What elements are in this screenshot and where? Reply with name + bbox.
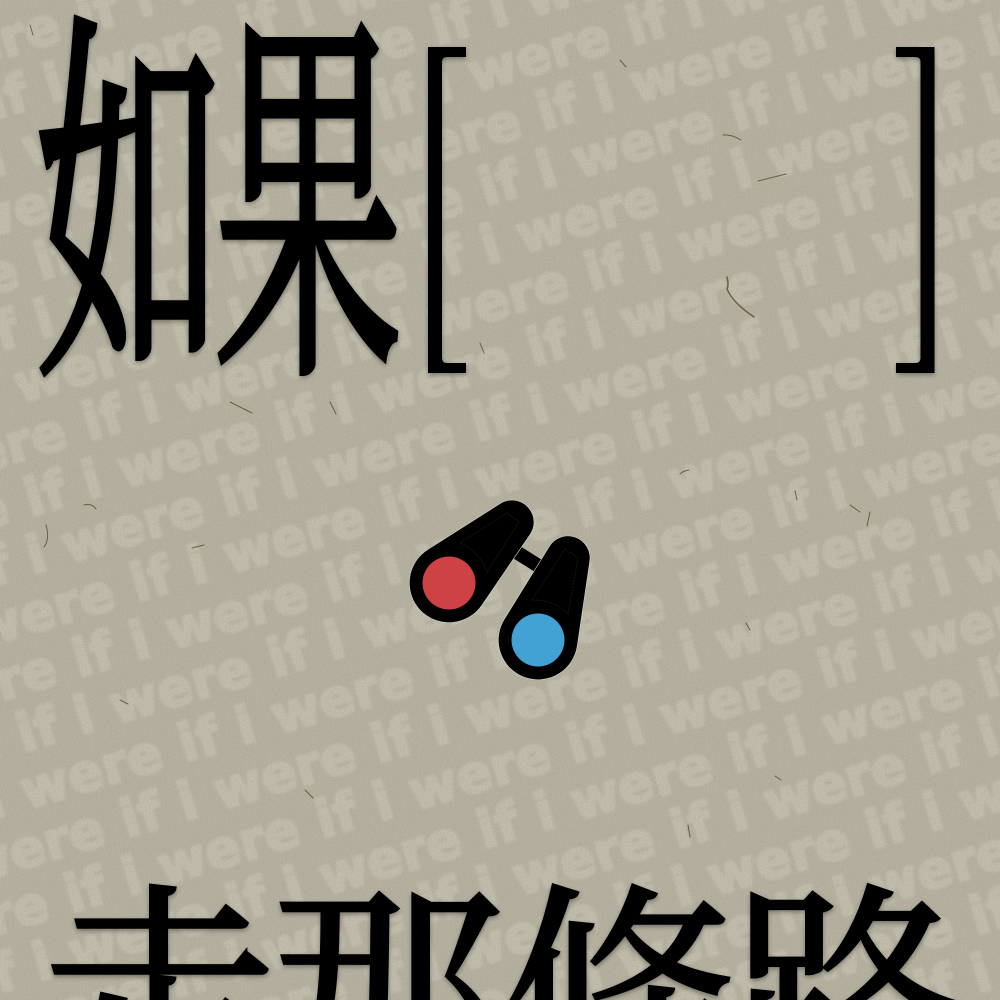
red lens: [422, 556, 476, 610]
paper fibres: [30, 25, 870, 837]
left barrel highlight: [460, 513, 519, 572]
icon: binoculars: [409, 500, 590, 680]
right barrel highlight: [532, 549, 578, 614]
bridge: [510, 548, 545, 570]
blue lens: [512, 614, 564, 666]
right barrel: [498, 536, 590, 680]
left bracket: [428, 47, 466, 373]
left barrel: [409, 500, 534, 623]
title: 如果: 如果: [35, 0, 403, 426]
right bracket: [896, 47, 934, 373]
